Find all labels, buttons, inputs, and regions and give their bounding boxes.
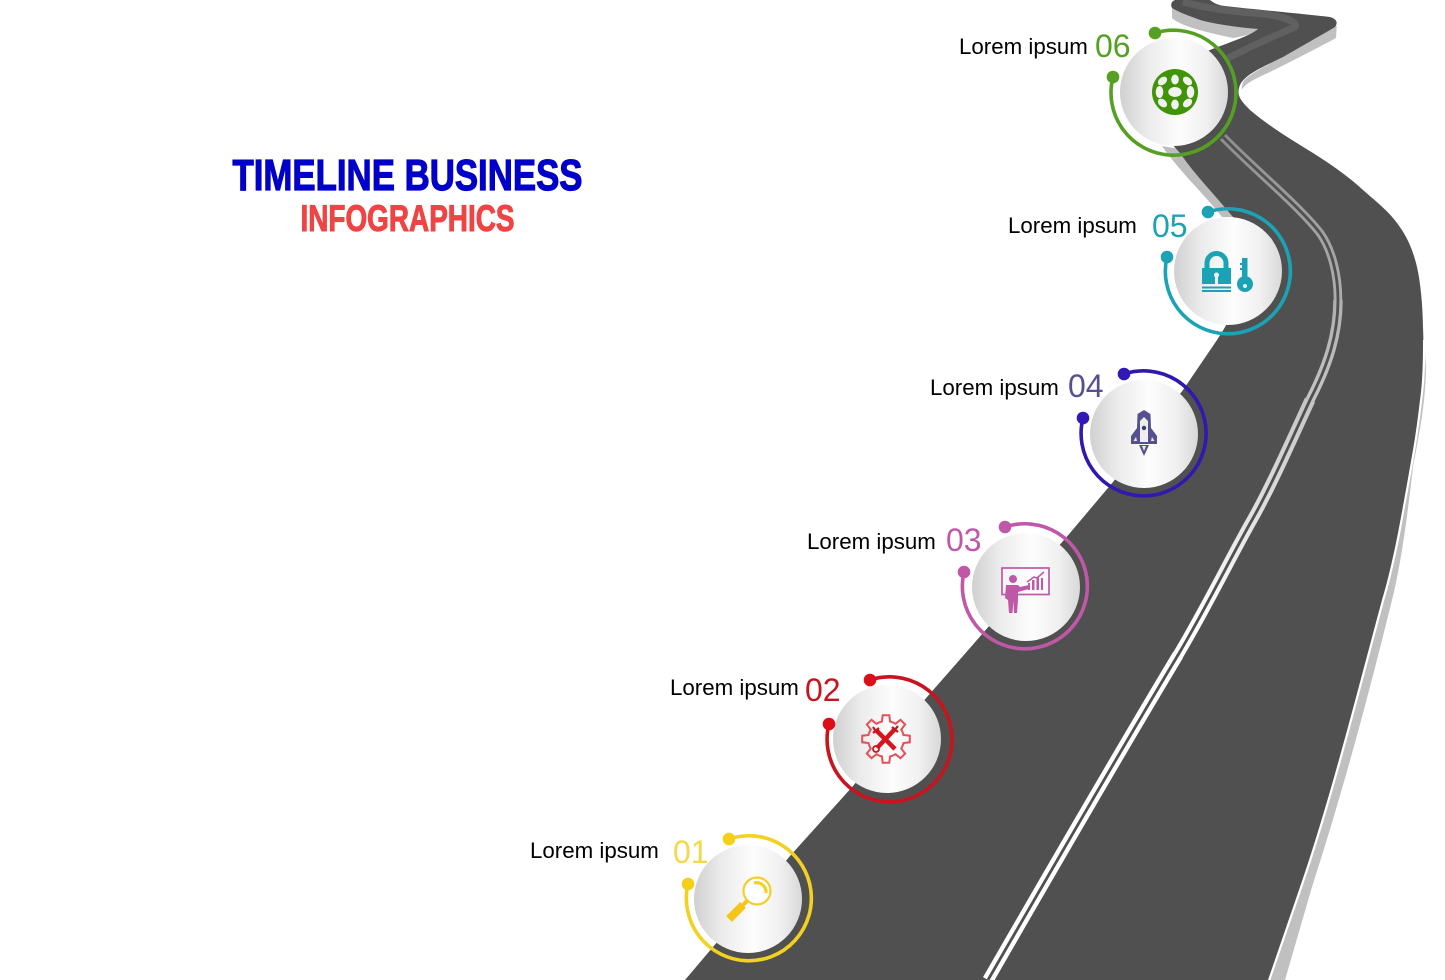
icon: magnifier <box>729 878 770 919</box>
disc <box>833 685 941 793</box>
ring <box>962 524 1087 649</box>
road curb, long right edge <box>1262 300 1426 980</box>
centre line, upper bend <box>1310 300 1338 400</box>
ring dots <box>1077 368 1130 424</box>
disc <box>972 533 1080 641</box>
step 01 <box>530 833 811 961</box>
ring dots <box>682 833 735 890</box>
ring <box>1165 209 1290 334</box>
label: Lorem ipsum <box>530 838 659 863</box>
step 05 <box>1008 206 1290 334</box>
icon: rocket <box>1131 410 1157 456</box>
number: 01 <box>673 834 709 870</box>
title <box>232 151 582 239</box>
road white edge <box>1240 23 1423 980</box>
centre line gap <box>988 137 1338 980</box>
ring <box>686 836 811 961</box>
ring <box>1111 30 1236 155</box>
centre line, lower <box>988 655 1178 980</box>
label: Lorem ipsum <box>1008 213 1137 238</box>
ring dots <box>958 521 1011 578</box>
disc <box>1174 217 1282 325</box>
number: 03 <box>946 522 982 558</box>
road curb, right side <box>1238 22 1337 96</box>
title line 2: INFOGRAPHICS <box>300 198 514 239</box>
step 03 <box>807 521 1087 649</box>
icon: gear and wrenches <box>862 715 910 763</box>
winding road <box>685 0 1426 980</box>
label: Lorem ipsum <box>930 375 1059 400</box>
ring dots <box>1161 206 1214 263</box>
number: 05 <box>1152 208 1188 244</box>
centre line, middle <box>1178 400 1310 655</box>
top hairpin lane marking <box>1183 2 1295 60</box>
step 02 <box>670 672 952 802</box>
icon: padlock and key <box>1202 254 1253 292</box>
step 06 <box>959 27 1236 155</box>
number: 06 <box>1095 28 1131 64</box>
number: 02 <box>805 672 841 708</box>
road curb, lower left <box>1162 146 1234 217</box>
number: 04 <box>1068 368 1104 404</box>
icon: globe pattern <box>1152 69 1198 115</box>
ring dots <box>823 674 876 730</box>
label: Lorem ipsum <box>670 675 799 700</box>
disc <box>1090 380 1198 488</box>
ring <box>1081 371 1206 496</box>
asphalt surface <box>685 0 1423 980</box>
disc <box>1120 38 1228 146</box>
disc <box>694 845 802 953</box>
label: Lorem ipsum <box>959 34 1088 59</box>
label: Lorem ipsum <box>807 529 936 554</box>
title line 1: TIMELINE BUSINESS <box>232 151 582 200</box>
ring dots <box>1107 27 1161 83</box>
ring <box>827 677 952 802</box>
road curb, left hairpin <box>1172 8 1260 38</box>
step 04 <box>930 368 1206 496</box>
centre line, upper <box>1223 137 1338 300</box>
icon: presenter with chart <box>1002 568 1049 613</box>
